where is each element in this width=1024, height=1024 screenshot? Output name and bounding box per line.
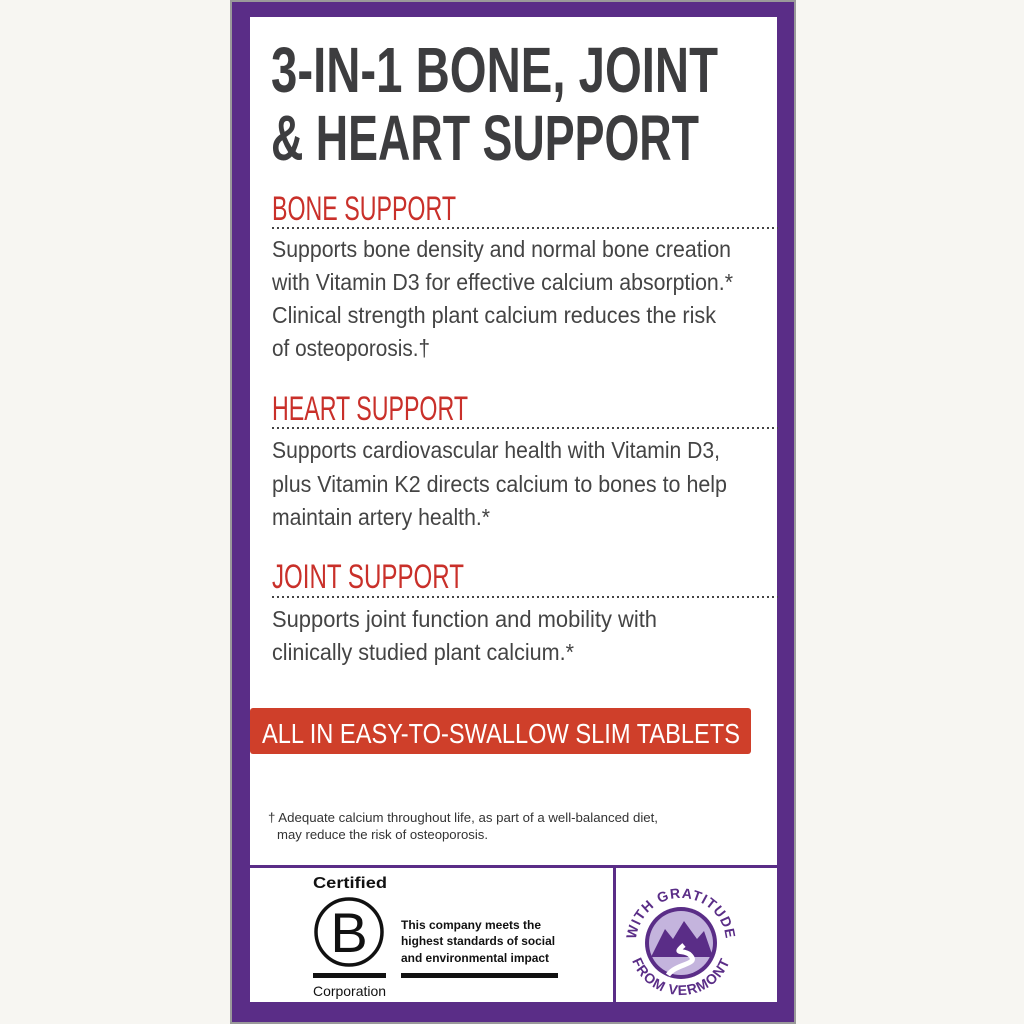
section: heart support: HEART SUPPORT xyxy=(272,390,468,428)
section: bone support xyxy=(271,190,778,361)
logo: certified B corporation: Certified xyxy=(313,875,387,892)
footnote: † Adequate calcium throughout life, as part of a well-balanced diet, xyxy=(268,810,658,825)
banner: slim tablets xyxy=(250,708,751,754)
section: bone support: BONE SUPPORT xyxy=(272,190,456,228)
badge: with gratitude from vermont xyxy=(626,888,736,996)
badge: with gratitude from vermont: WITH GRATITUDE xyxy=(626,888,736,938)
section: heart support xyxy=(272,390,778,530)
logo: certified B corporation: This company meets the xyxy=(401,918,541,932)
title xyxy=(271,34,718,174)
footnote xyxy=(268,810,658,842)
section: bone support: Clinical strength plant calcium reduces the risk xyxy=(272,302,716,328)
logo: certified B corporation: B xyxy=(330,901,368,964)
section: joint support xyxy=(272,558,778,665)
logo: certified B corporation: Corporation xyxy=(313,983,386,999)
footnote: may reduce the risk of osteoporosis. xyxy=(277,827,488,842)
section: heart support: maintain artery health.* xyxy=(272,504,490,530)
section: bone support: with Vitamin D3 for effective calcium absorption.* xyxy=(271,269,733,295)
badge: with gratitude from vermont: FROM VERMONT xyxy=(632,957,728,996)
section: bone support: of osteoporosis.† xyxy=(272,335,430,361)
logo: certified B corporation xyxy=(313,875,558,999)
title: 3-IN-1 BONE, JOINT xyxy=(271,34,718,106)
logo: certified B corporation: and environmental impact xyxy=(401,951,549,965)
section: joint support: Supports joint function and mobility with xyxy=(272,606,657,632)
section: heart support: Supports cardiovascular health with Vitamin D3, xyxy=(272,437,720,463)
section: joint support: JOINT SUPPORT xyxy=(272,558,464,596)
section: joint support: clinically studied plant calcium.* xyxy=(272,639,574,665)
section: heart support: plus Vitamin K2 directs calcium to bones to help xyxy=(272,471,727,497)
banner: slim tablets: ALL IN EASY-TO-SWALLOW SLIM TABLETS xyxy=(262,718,740,749)
logo: certified B corporation: highest standards of social xyxy=(401,934,555,948)
panel: purple framed card xyxy=(230,0,796,1024)
section: bone support: Supports bone density and normal bone creation xyxy=(272,236,731,262)
title: & HEART SUPPORT xyxy=(271,102,699,174)
